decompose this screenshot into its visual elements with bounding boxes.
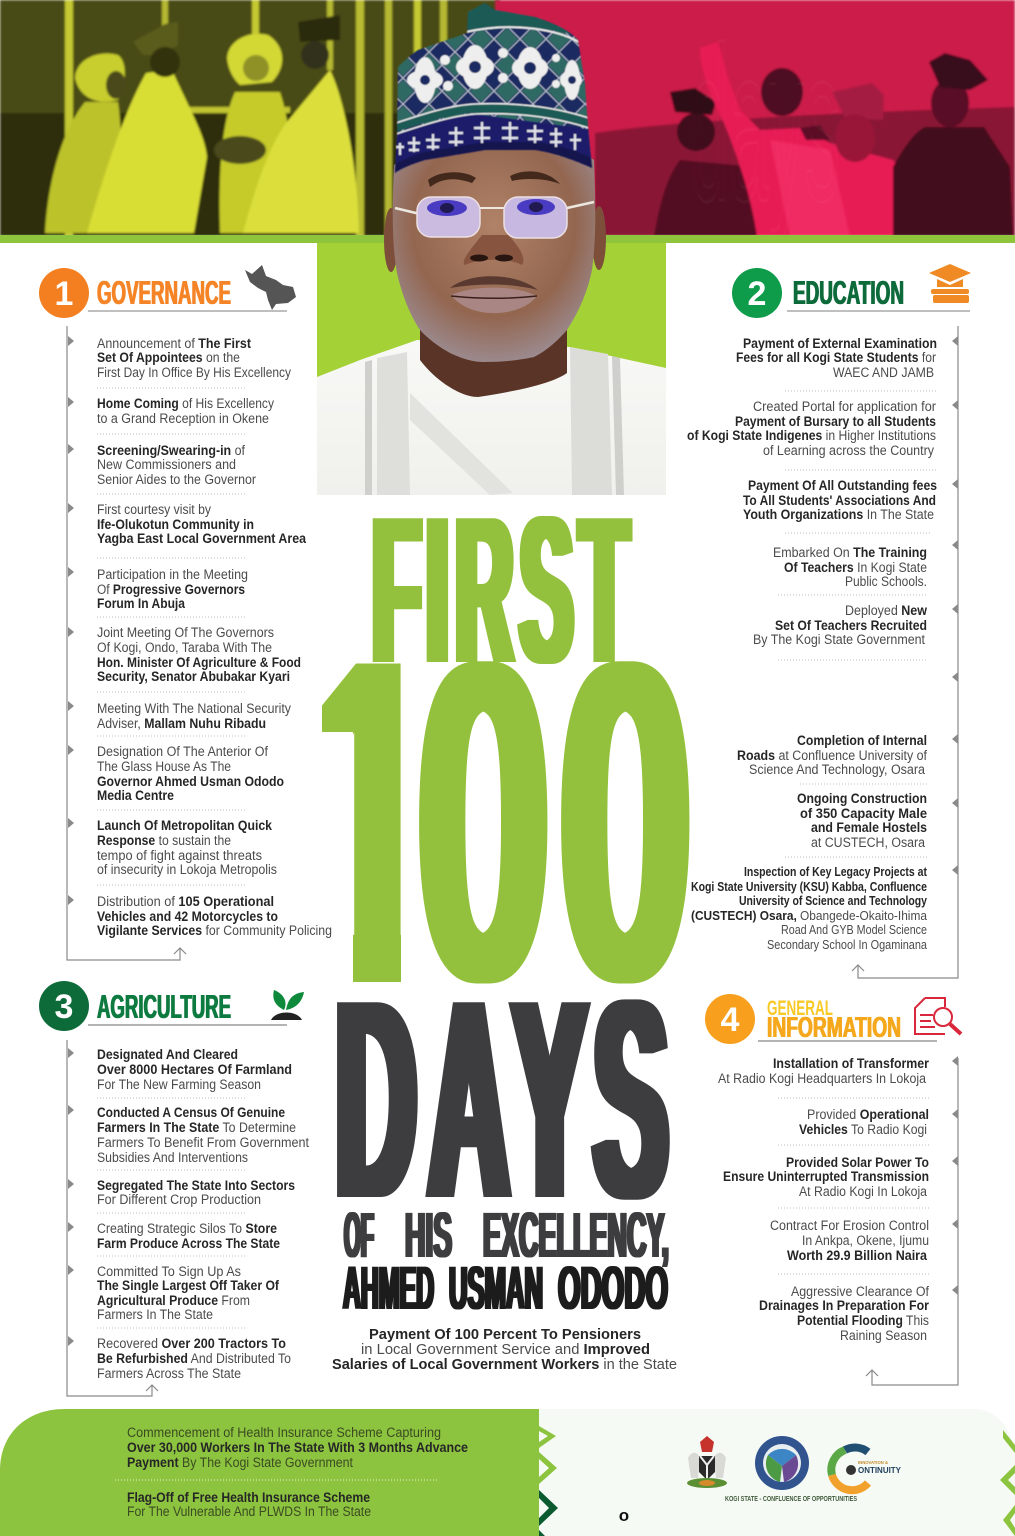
item: [97, 744, 284, 803]
item: Ensure Uninterrupted Transmission: [723, 1169, 929, 1184]
item: [718, 1056, 930, 1086]
item: Vehicles and 42 Motorcycles to: [97, 909, 278, 924]
item: New Commissioners and: [97, 457, 236, 472]
title: name: AHMED: [343, 1254, 434, 1322]
item: Aggressive Clearance Of: [791, 1284, 929, 1299]
item: [97, 1105, 309, 1165]
item: [97, 1264, 279, 1322]
section 2 header: education: [732, 264, 971, 318]
icon: document and magnifier: [915, 998, 961, 1034]
item: of Kogi State Indigenes in Higher Institutions: [687, 428, 936, 443]
section 3 header: agriculture: 3: [55, 988, 73, 1026]
section 3 header: agriculture: [39, 981, 304, 1031]
item: [687, 399, 936, 458]
item: Raining Season: [840, 1328, 927, 1343]
tagline: KOGI STATE - CONFLUENCE OF OPPORTUNITIES: [725, 1496, 857, 1503]
footer text: flag-off: Flag-Off of Free Health Insurance Scheme: [127, 1490, 370, 1505]
item: Subsidies And Interventions: [97, 1150, 248, 1165]
section 4 list: general information: [718, 1056, 958, 1385]
woman left: [45, 102, 125, 233]
item: [97, 502, 306, 546]
item: [799, 1107, 929, 1137]
mustache: [450, 276, 538, 290]
item: [97, 1047, 292, 1092]
item: Payment of Bursary to all Students: [735, 414, 936, 429]
item: Drainages In Preparation For: [759, 1298, 930, 1313]
section 3 header: agriculture: AGRICULTURE: [97, 988, 231, 1025]
item: (CUSTECH) Osara, Obangede-Okaito-Ihima: [691, 909, 927, 923]
item: Deployed New: [845, 603, 927, 618]
section 1 header: governance: [39, 265, 296, 318]
item: Media Centre: [97, 788, 174, 803]
item: Governor Ahmed Usman Ododo: [97, 774, 284, 789]
item: Joint Meeting Of The Governors: [97, 625, 274, 640]
item: [743, 478, 937, 522]
item: Road And GYB Model Science: [781, 923, 927, 937]
logo: continuity: [831, 1447, 902, 1490]
item: Farmers Across The State: [97, 1366, 241, 1381]
item: Created Portal for application for: [753, 399, 936, 414]
item: Be Refurbished And Distributed To: [97, 1351, 291, 1366]
item: Conducted A Census Of Genuine: [97, 1105, 285, 1120]
neck: [420, 325, 567, 397]
item: [773, 545, 927, 589]
section 4 header: general information: [705, 994, 961, 1044]
title: FIRST: FIRST: [372, 473, 628, 707]
footer text: flag-off: For The Vulnerable And PLWDS In The State: [127, 1504, 371, 1519]
item: [97, 625, 301, 684]
item: Inspection of Key Legacy Projects at: [744, 865, 928, 879]
item: The Glass House As The: [97, 759, 231, 774]
woman centre: [220, 92, 292, 233]
item: [759, 1284, 930, 1343]
center text: pensioners: Salaries of Local Government Workers in the State: [332, 1357, 677, 1373]
item: to a Grand Reception in Okene: [97, 411, 269, 426]
man centre: [761, 68, 803, 116]
item: Public Schools.: [845, 574, 927, 589]
item: [770, 1218, 929, 1263]
item: Security, Senator Abubakar Kyari: [97, 669, 290, 684]
title: 100: [304, 564, 693, 1081]
header photo: right crimson duotone: [495, 0, 1015, 247]
item: Installation of Transformer: [773, 1056, 930, 1071]
item: Over 8000 Hectares Of Farmland: [97, 1062, 292, 1077]
waving arm and robe: [700, 42, 951, 236]
section 2 header: education: 2: [748, 275, 766, 313]
item: [736, 336, 937, 380]
item: Creating Strategic Silos To Store: [97, 1221, 277, 1236]
logo: coat of arms: [687, 1436, 727, 1488]
text: EXCELLENCY,: [483, 1199, 669, 1271]
header photo: left yellow duotone: [0, 0, 500, 236]
item: Of Teachers In Kogi State: [784, 560, 927, 575]
item: Of Kogi, Ondo, Taraba With The: [97, 640, 272, 655]
title: of his excellency: HIS: [405, 1199, 452, 1271]
item: [97, 1336, 291, 1381]
logo: continuity: ONTINUITY: [858, 1466, 902, 1475]
center text: pensioners: [332, 1327, 677, 1373]
item: Secondary School In Ogaminana: [767, 938, 927, 952]
item: [97, 443, 256, 487]
item: of Learning across the Country: [763, 443, 934, 458]
item: Farmers In The State To Determine: [97, 1120, 296, 1135]
item: Fees for all Kogi State Students for: [736, 350, 936, 365]
footer text: health scheme: Commencement of Health Insurance Scheme Capturing: [127, 1425, 441, 1440]
logo: continuity: INNOVATION &: [858, 1460, 889, 1465]
item: Forum In Abuja: [97, 596, 185, 611]
title: name: [343, 1254, 668, 1322]
man right: [243, 70, 359, 233]
item: Senior Aides to the Governor: [97, 472, 256, 487]
item: Payment of External Examination: [743, 336, 937, 351]
item: Set Of Teachers Recruited: [775, 618, 927, 633]
item: of 350 Capacity Male: [800, 806, 927, 821]
man with cap: [832, 83, 884, 120]
section 4 header: general information: INFORMATION: [767, 1012, 901, 1044]
item: For The New Farming Season: [97, 1077, 261, 1092]
footer text: health scheme: [127, 1425, 468, 1470]
item: Payment Of All Outstanding fees: [748, 478, 937, 493]
section 2 list: education: [687, 326, 958, 978]
item: Provided Solar Power To: [786, 1155, 929, 1170]
item: [97, 894, 332, 938]
center text: pensioners: in Local Government Service and Improved: [361, 1342, 650, 1358]
icon: graduation cap and books: [929, 264, 971, 303]
item: Hon. Minister Of Agriculture & Food: [97, 655, 301, 670]
green strip under header: [0, 235, 1015, 243]
icon: Kogi state map: [245, 265, 296, 310]
item: [97, 1221, 280, 1251]
portrait panel: [317, 0, 666, 495]
officer left: [654, 160, 757, 236]
item: and Female Hostels: [811, 820, 927, 835]
item: At Radio Kogi Headquarters In Lokoja: [718, 1071, 926, 1086]
logo: Kogi State seal: [755, 1436, 809, 1490]
item: Youth Organizations In The State: [743, 507, 934, 522]
man left: [87, 70, 207, 233]
item: [753, 603, 927, 647]
item: tempo of fight against threats: [97, 848, 262, 863]
stray glyph: o: [619, 1506, 629, 1525]
item: Launch Of Metropolitan Quick: [97, 818, 272, 833]
item: University of Science and Technology: [739, 894, 927, 908]
item: Yagba East Local Government Area: [97, 531, 306, 546]
item: Kogi State University (KSU) Kabba, Confluence: [691, 880, 927, 894]
title: of his excellency: [344, 1199, 669, 1271]
item: First Day In Office By His Excellency: [97, 365, 291, 380]
item: Segregated The State Into Sectors: [97, 1178, 295, 1193]
title: 100: 0: [416, 568, 551, 1076]
item: Set Of Appointees on the: [97, 350, 240, 365]
item: [97, 818, 277, 877]
item: First courtesy visit by: [97, 502, 211, 517]
item: Science And Technology, Osara: [749, 762, 925, 777]
item: Response to sustain the: [97, 833, 231, 848]
item: For Different Crop Production: [97, 1192, 261, 1207]
item: In Ankpa, Okene, Ijumu: [802, 1233, 929, 1248]
item: Roads at Confluence University of: [737, 748, 927, 763]
glasses: [395, 197, 594, 238]
item: Potential Flooding This: [797, 1313, 929, 1328]
item: Designated And Cleared: [97, 1047, 238, 1062]
cap: [390, 0, 600, 180]
officer right: [893, 127, 1013, 236]
center text: pensioners: Payment Of 100 Percent To Pensioners: [369, 1327, 641, 1343]
section 4 header: general information: GENERAL: [767, 997, 833, 1020]
footer chevrons: [539, 1426, 1015, 1536]
section 2 header: education: EDUCATION: [793, 274, 904, 311]
ears: [384, 208, 398, 272]
item: Participation in the Meeting: [97, 567, 248, 582]
item: [797, 791, 927, 850]
section 1 header: governance: 1: [55, 275, 73, 313]
item: Contract For Erosion Control: [770, 1218, 929, 1233]
footer text: health scheme: Over 30,000 Workers In The State With 3 Months Advance: [127, 1440, 468, 1455]
item: Announcement of The First: [97, 336, 251, 351]
item: Provided Operational: [807, 1107, 929, 1122]
text: ODODO: [558, 1254, 668, 1322]
footer panel: green health insurance: [0, 1409, 539, 1536]
item: Adviser, Mallam Nuhu Ribadu: [97, 716, 266, 731]
item: Vehicles To Radio Kogi: [799, 1122, 927, 1137]
footer panel: right white part: [539, 1409, 1015, 1536]
robe: [317, 340, 666, 495]
item: Completion of Internal: [797, 733, 927, 748]
item: Committed To Sign Up As: [97, 1264, 241, 1279]
item: Home Coming of His Excellency: [97, 396, 274, 411]
title: name: USMAN: [449, 1254, 543, 1322]
footer text: health scheme: Payment By The Kogi State Government: [127, 1455, 353, 1470]
item: Of Progressive Governors: [97, 582, 245, 597]
item: Farmers In The State: [97, 1307, 213, 1322]
item: Farm Produce Across The State: [97, 1236, 280, 1251]
cap lower motifs: [396, 122, 581, 155]
item: Farmers To Benefit From Government: [97, 1135, 309, 1150]
title: of his excellency: OF: [344, 1199, 374, 1271]
item: [723, 1155, 929, 1199]
item: [691, 865, 928, 952]
section 1 header: governance: GOVERNANCE: [97, 274, 231, 311]
item: at CUSTECH, Osara: [811, 835, 925, 850]
eyebrows: [428, 172, 476, 187]
item: Meeting With The National Security: [97, 701, 291, 716]
item: [737, 733, 927, 777]
item: of insecurity in Lokoja Metropolis: [97, 862, 277, 877]
item: By The Kogi State Government: [753, 632, 925, 647]
lips: [451, 288, 537, 313]
cap flowers: [407, 45, 582, 103]
item: Ife-Olukotun Community in: [97, 517, 254, 532]
item: [97, 567, 248, 611]
item: At Radio Kogi In Lokoja: [799, 1184, 927, 1199]
face: [393, 135, 595, 362]
item: [97, 336, 291, 380]
item: Designation Of The Anterior Of: [97, 744, 268, 759]
item: [97, 701, 291, 731]
item: Screening/Swearing-in of: [97, 443, 245, 458]
section 1 list: governance: [67, 326, 332, 960]
item: WAEC AND JAMB: [833, 365, 934, 380]
item: Worth 29.9 Billion Naira: [787, 1248, 927, 1263]
item: Ongoing Construction: [797, 791, 927, 806]
footer text: flag-off: [127, 1490, 371, 1519]
item: [97, 396, 274, 426]
item: Vigilante Services for Community Policing: [97, 923, 332, 938]
title: 100: 1: [304, 564, 439, 1081]
icon: plant: [271, 990, 304, 1020]
title: 100: 0: [558, 568, 693, 1076]
title: DAYS: DAYS: [336, 941, 668, 1258]
section 3 list: agriculture: [67, 1040, 309, 1396]
item: Recovered Over 200 Tractors To: [97, 1336, 286, 1351]
item: [97, 1178, 295, 1207]
section 4 header: general information: 4: [721, 1001, 740, 1039]
nose: [464, 235, 523, 265]
item: Agricultural Produce From: [97, 1293, 250, 1308]
item: The Single Largest Off Taker Of: [97, 1278, 279, 1293]
item: Embarked On The Training: [773, 545, 927, 560]
item: To All Students' Associations And: [743, 493, 936, 508]
item: Distribution of 105 Operational: [97, 894, 274, 909]
